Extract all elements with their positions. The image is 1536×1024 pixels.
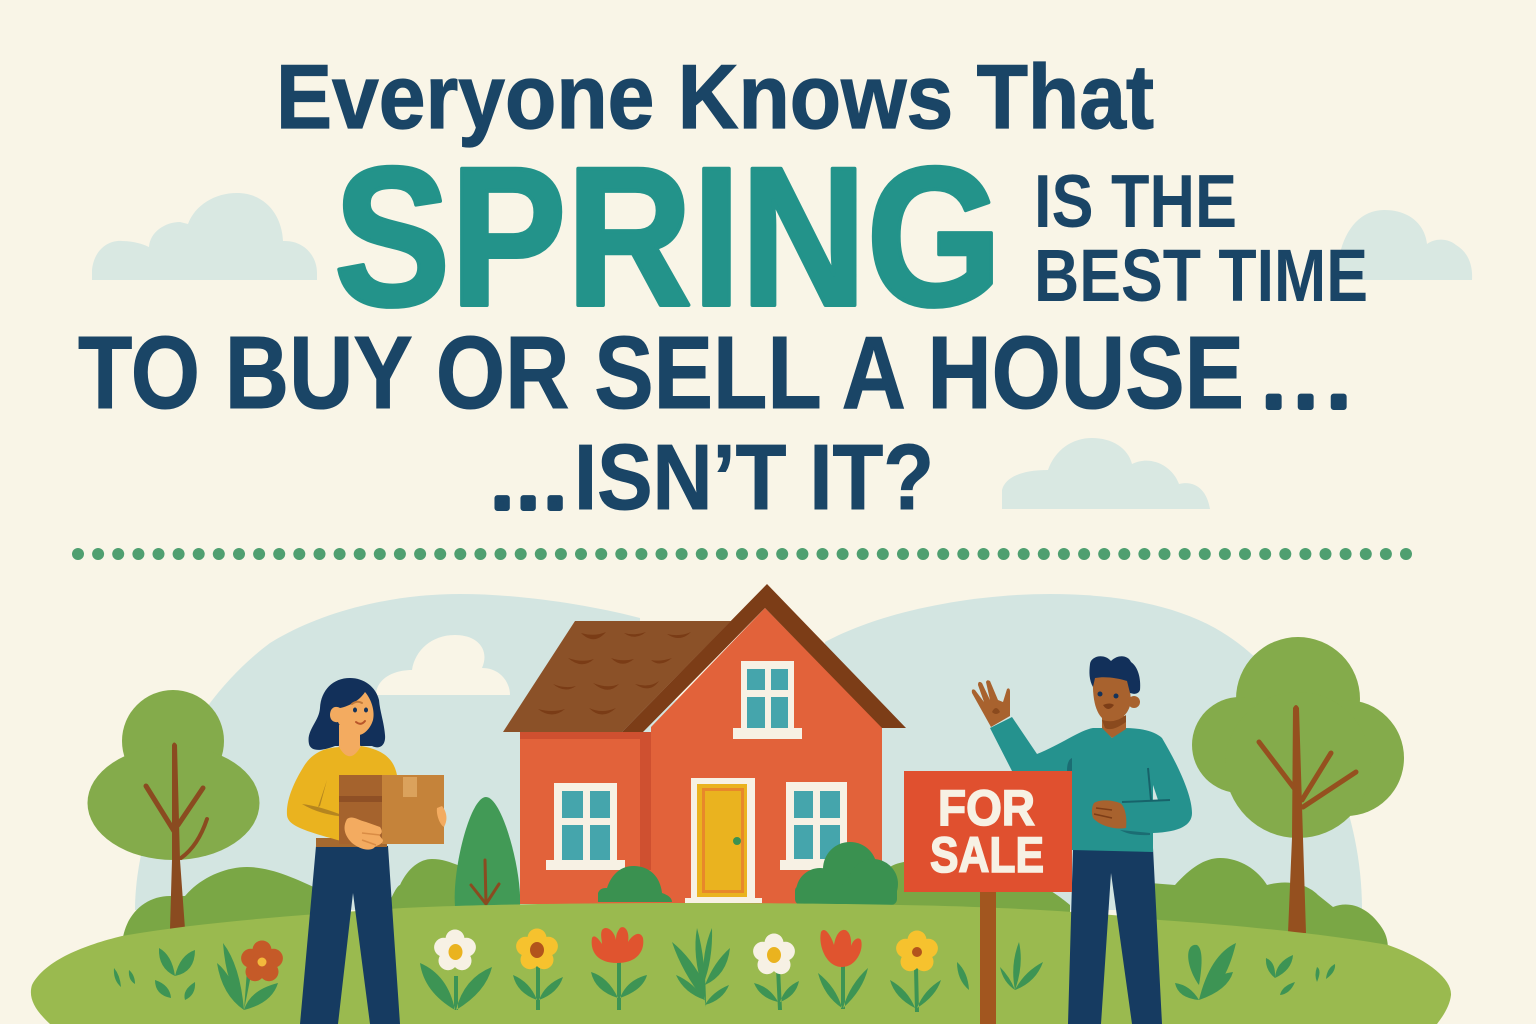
flower: white daisy 2 <box>753 934 799 1010</box>
woman hair <box>309 678 385 750</box>
headline IS THE: IS THE <box>1034 159 1237 243</box>
man resting hand <box>1092 800 1126 829</box>
woman hands <box>345 806 446 850</box>
headline keyword SPRING: SPRING <box>334 126 1002 347</box>
cardboard box <box>339 775 444 844</box>
headline ISN'T IT?: ISN’T IT? <box>574 425 934 529</box>
cypress shrub <box>455 797 520 906</box>
woman holding box <box>287 678 446 1024</box>
woman facial features <box>352 702 368 724</box>
wing shadow <box>520 732 651 870</box>
sign text SALE: SALE <box>930 827 1044 883</box>
sweater fold <box>302 780 347 817</box>
front door <box>685 778 762 903</box>
ellipsis after house: ... <box>1264 344 1348 422</box>
tree trunk and branches <box>146 742 207 929</box>
tree canopy <box>1192 637 1404 838</box>
shingle marks <box>538 632 691 714</box>
house main wall <box>651 608 882 904</box>
man pants <box>1068 848 1162 1024</box>
upper window <box>733 661 802 739</box>
flower: red tulip 2 <box>818 930 868 1009</box>
woman sweater <box>287 746 397 842</box>
roof shingles panel <box>503 621 731 732</box>
man waving <box>972 656 1192 1024</box>
man facial features <box>1098 692 1118 709</box>
cloud: upper left <box>92 193 317 280</box>
headline BEST TIME: BEST TIME <box>1034 234 1368 317</box>
shrub: left of door <box>598 866 672 902</box>
right foliage <box>1175 943 1335 1000</box>
sign board <box>904 771 1072 892</box>
sweater folds <box>1067 758 1170 835</box>
man sweater <box>990 717 1192 852</box>
cloud: middle right <box>1002 438 1210 509</box>
sign text FOR: FOR <box>938 780 1035 836</box>
lower right window <box>780 782 855 870</box>
dotted divider <box>72 548 1412 560</box>
leading ellipsis: ... <box>493 448 564 522</box>
sign post <box>980 892 996 1024</box>
sky hills <box>135 594 1362 910</box>
for sale sign <box>904 771 1072 892</box>
tree trunk and branches <box>1259 705 1356 933</box>
man hair <box>1089 656 1140 694</box>
flower: yellow 2 <box>890 930 941 1012</box>
man ear <box>1128 696 1140 708</box>
flower row <box>420 927 1043 1012</box>
cloud: behind woman <box>376 635 510 695</box>
flower: red tulip 1 <box>591 927 647 1010</box>
tree canopy <box>88 690 260 860</box>
grass foreground <box>31 903 1451 1024</box>
roof gable trim <box>622 584 906 732</box>
left foliage <box>114 943 278 1010</box>
cloud: upper right <box>1337 210 1472 280</box>
headline line 1: Everyone Knows That <box>276 47 1154 148</box>
house side wing wall <box>520 732 655 904</box>
woman belt <box>316 838 387 847</box>
woman neck <box>338 725 362 758</box>
flower: orange <box>241 940 283 981</box>
flower: white daisy 1 <box>420 930 492 1010</box>
man waving hand <box>972 680 1010 727</box>
man neck <box>1102 716 1126 738</box>
woman pants <box>300 846 400 1024</box>
headline line 3: TO BUY OR SELL A HOUSE <box>78 315 1244 430</box>
background bushes <box>122 858 1388 950</box>
woman face <box>330 692 374 735</box>
tree: right <box>1192 637 1404 933</box>
tree: left <box>88 690 260 929</box>
plant: leafy sprig <box>672 928 730 1007</box>
flower: yellow 1 <box>513 928 563 1010</box>
leaf: single <box>957 962 969 990</box>
title block <box>78 47 1368 529</box>
lower left window <box>546 783 625 870</box>
shrub: right of door <box>795 842 898 916</box>
plant: sprig by sign <box>1000 942 1043 990</box>
sky gap at elbow <box>1153 785 1158 800</box>
man face <box>1093 676 1131 722</box>
house <box>503 584 906 916</box>
man chin shadow <box>1102 715 1126 729</box>
